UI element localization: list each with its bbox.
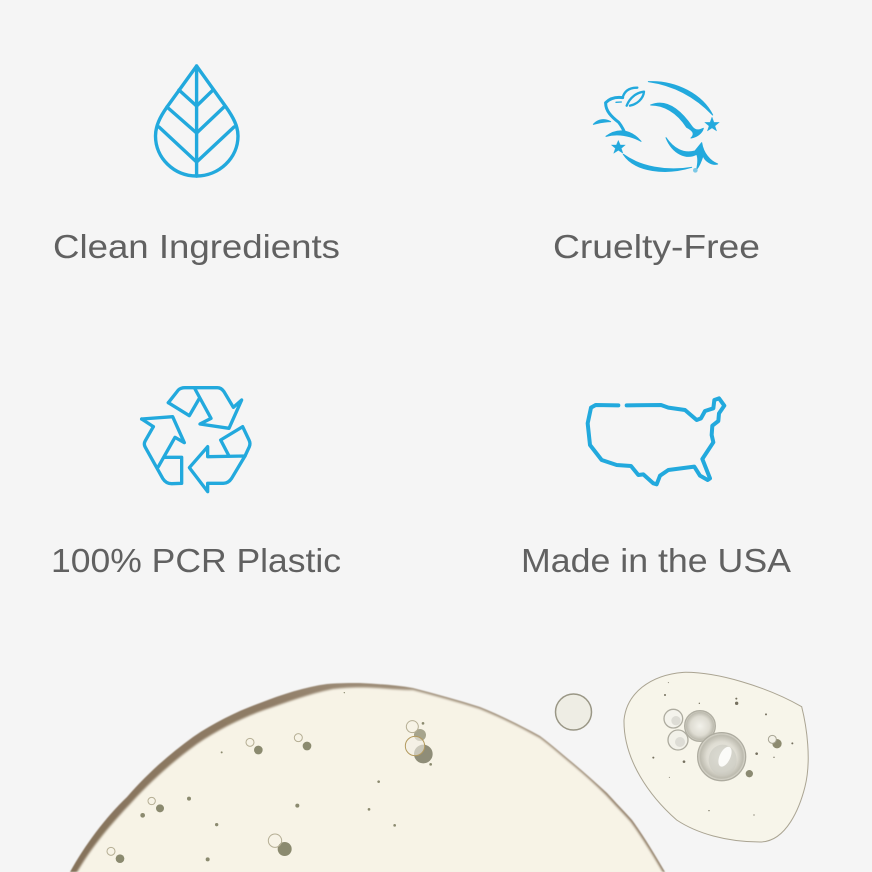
bubbles in the large droplet: [107, 692, 433, 863]
bubble cluster: [664, 709, 753, 781]
large serum droplet: [70, 683, 665, 872]
label: Clean Ingredients: Clean Ingredients: [53, 228, 340, 265]
label: Made in the USA: Made in the USA: [521, 542, 791, 579]
icon: leaping bunny: [593, 82, 719, 173]
label: Cruelty-Free: Cruelty-Free: [553, 228, 760, 265]
small round droplet: [556, 694, 592, 730]
speckles: [652, 682, 793, 816]
icon: recycling arrows: [142, 388, 250, 492]
bunny head and chest: [606, 88, 644, 131]
teardrop serum droplet: [624, 672, 808, 842]
side bubble: [768, 735, 782, 748]
label: 100% PCR Plastic: 100% PCR Plastic: [51, 542, 341, 579]
icon: USA outline: [588, 398, 724, 484]
icon: leaf drop: [156, 66, 238, 176]
